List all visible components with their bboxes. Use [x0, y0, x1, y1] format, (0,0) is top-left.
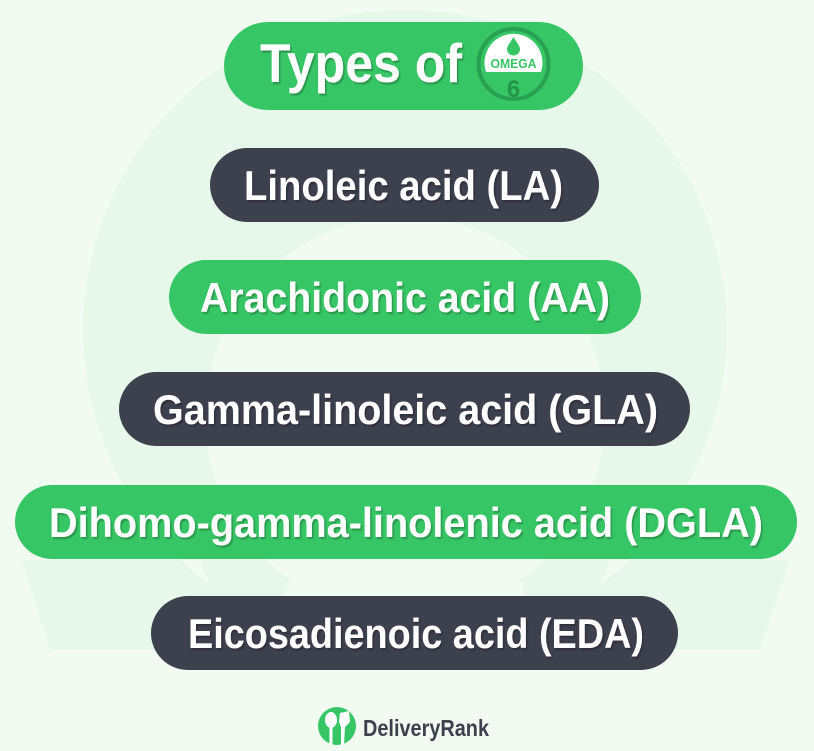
title text: Types of: [260, 32, 463, 94]
pill: Dihomo-gamma-linolenic acid (DGLA): Dihomo-gamma-linolenic acid (DGLA): [49, 499, 763, 546]
pill: Arachidonic acid (AA): [169, 260, 641, 334]
title pill: [224, 22, 583, 110]
icon: omega 6 badge: [478, 29, 548, 103]
pill: Dihomo-gamma-linolenic acid (DGLA): [15, 485, 797, 559]
pill: Linoleic acid (LA): [210, 148, 599, 222]
pill: Eicosadienoic acid (EDA): [151, 596, 678, 670]
icon: omega 6 badge: 6: [507, 76, 520, 103]
icon: omega 6 badge: OMEGA: [490, 56, 537, 71]
pill: Gamma-linoleic acid (GLA): [119, 372, 690, 446]
pill: Linoleic acid (LA): Linoleic acid (LA): [244, 162, 563, 209]
pill: Eicosadienoic acid (EDA): Eicosadienoic acid (EDA): [188, 610, 644, 657]
pill: Gamma-linoleic acid (GLA): Gamma-linoleic acid (GLA): [153, 386, 658, 433]
logo: DeliveryRank: DeliveryRank: [363, 715, 489, 741]
icon: spoon and fork: [318, 707, 356, 745]
logo: DeliveryRank: [318, 707, 489, 745]
pill: Arachidonic acid (AA): Arachidonic acid (AA): [200, 274, 610, 321]
